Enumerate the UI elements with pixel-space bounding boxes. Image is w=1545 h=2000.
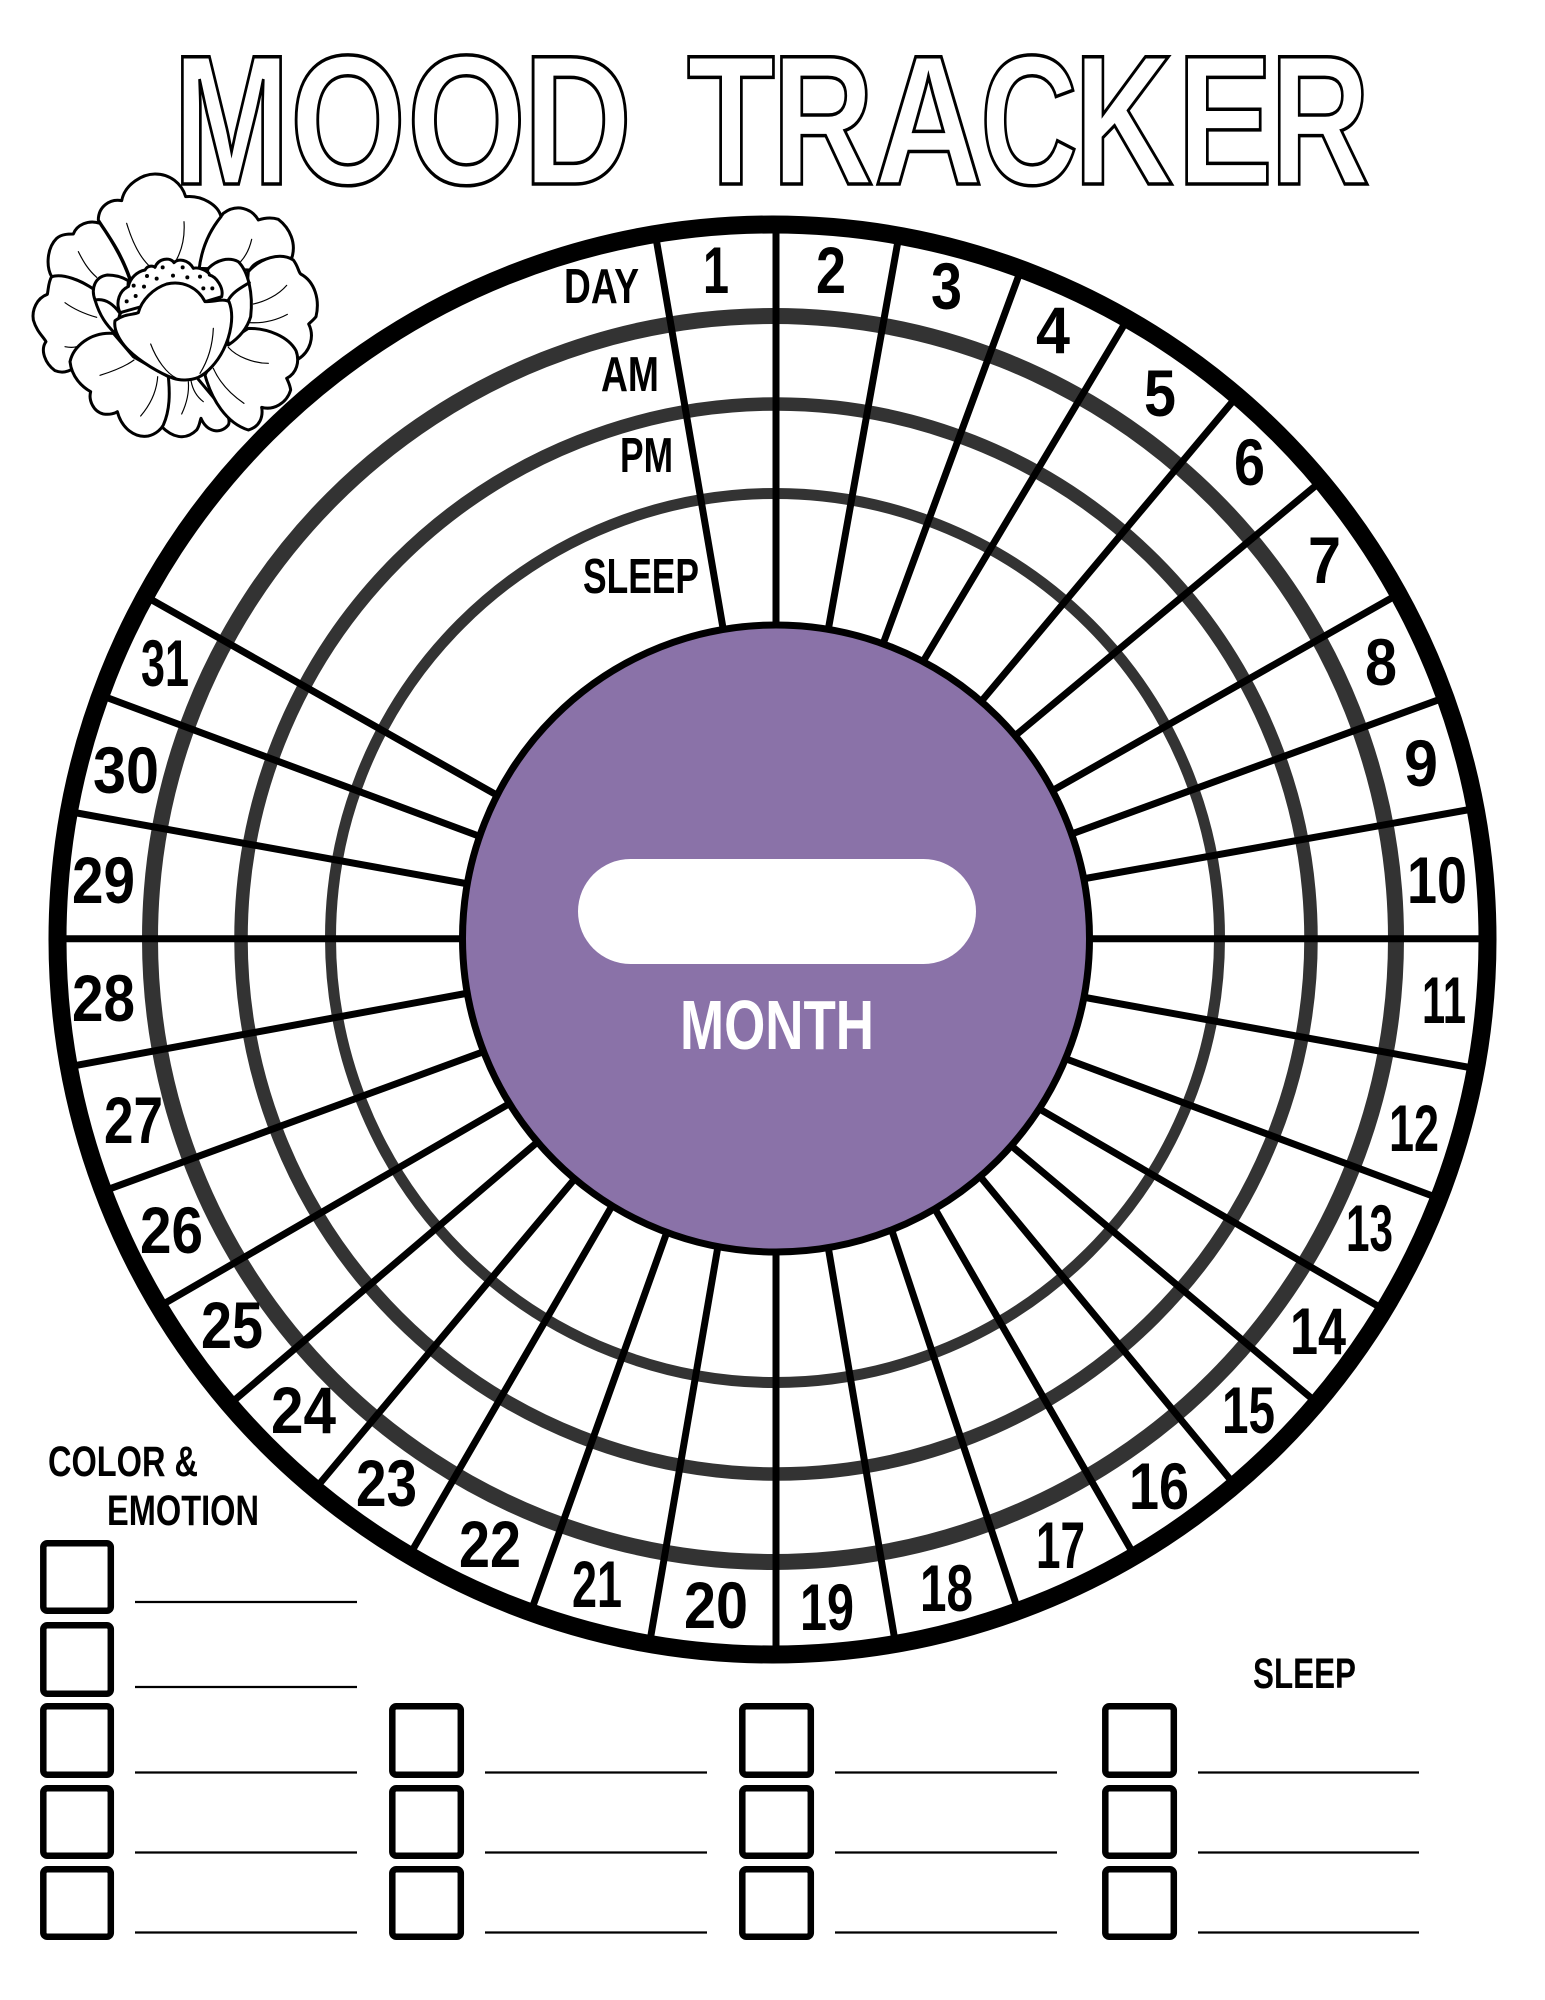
day numbers: 28 <box>72 961 135 1035</box>
day numbers <box>72 233 1467 1644</box>
legend heading: color and emotion <box>48 1438 259 1535</box>
day numbers: 4 <box>1036 293 1070 367</box>
day numbers: 30 <box>93 733 159 807</box>
month name pill <box>578 859 976 964</box>
row label: pm: PM <box>620 429 673 483</box>
legend swatches <box>43 1543 1174 1937</box>
day numbers: 11 <box>1422 963 1466 1037</box>
day numbers: 20 <box>684 1568 748 1642</box>
title <box>173 18 1370 224</box>
flower seed dots <box>125 265 214 303</box>
day numbers: 1 <box>703 233 729 307</box>
day spokes <box>67 228 1479 1650</box>
day numbers: 29 <box>72 843 135 917</box>
ring: am boundary <box>150 316 1396 1562</box>
mood wheel <box>58 224 1488 1654</box>
month label: MONTH <box>680 986 874 1064</box>
legend heading: sleep: SLEEP <box>1253 1650 1356 1698</box>
day numbers: 18 <box>920 1551 973 1625</box>
title: A <box>874 18 983 224</box>
title: E <box>1177 18 1273 224</box>
day numbers: 14 <box>1290 1294 1346 1368</box>
day numbers: 27 <box>104 1083 163 1157</box>
row label: am: AM <box>601 348 659 402</box>
legend heading: color and emotion: COLOR & <box>48 1438 198 1486</box>
title: M <box>173 18 290 224</box>
day numbers: 9 <box>1404 726 1438 800</box>
title: D <box>523 18 632 224</box>
day numbers: 31 <box>141 626 189 700</box>
day numbers: 7 <box>1308 523 1341 597</box>
title: T <box>687 18 775 224</box>
day numbers: 19 <box>800 1570 854 1644</box>
day numbers: 12 <box>1389 1091 1439 1165</box>
day numbers: 25 <box>201 1288 263 1362</box>
row label: day: DAY <box>564 260 639 314</box>
title: O <box>290 18 406 224</box>
day numbers: 8 <box>1365 625 1397 699</box>
ring: pm boundary <box>241 404 1311 1474</box>
icon: flower <box>33 174 317 437</box>
day numbers: 3 <box>931 249 962 323</box>
legend write-in lines <box>135 1602 1419 1932</box>
day numbers: 26 <box>140 1193 203 1267</box>
day numbers: 13 <box>1346 1191 1393 1265</box>
row label: sleep: SLEEP <box>583 550 699 604</box>
day numbers: 5 <box>1144 356 1176 430</box>
day numbers: 2 <box>816 233 846 307</box>
day numbers: 10 <box>1407 843 1467 917</box>
flower veins <box>65 222 287 416</box>
title: R <box>772 18 874 224</box>
title: C <box>980 18 1078 224</box>
day numbers: 17 <box>1036 1508 1085 1582</box>
ring: sleep boundary <box>330 494 1220 1382</box>
day numbers: 16 <box>1129 1449 1189 1523</box>
legend heading: color and emotion: EMOTION <box>107 1487 259 1535</box>
day numbers: 15 <box>1222 1373 1275 1447</box>
centre circle <box>462 625 1090 1252</box>
day numbers: 22 <box>459 1507 521 1581</box>
title: K <box>1074 18 1173 224</box>
day numbers: 23 <box>356 1446 417 1520</box>
outer ring <box>58 224 1488 1654</box>
title: O <box>407 18 526 224</box>
title: R <box>1270 18 1370 224</box>
day numbers: 6 <box>1234 425 1265 499</box>
day numbers: 24 <box>271 1373 336 1447</box>
day numbers: 21 <box>572 1547 622 1621</box>
